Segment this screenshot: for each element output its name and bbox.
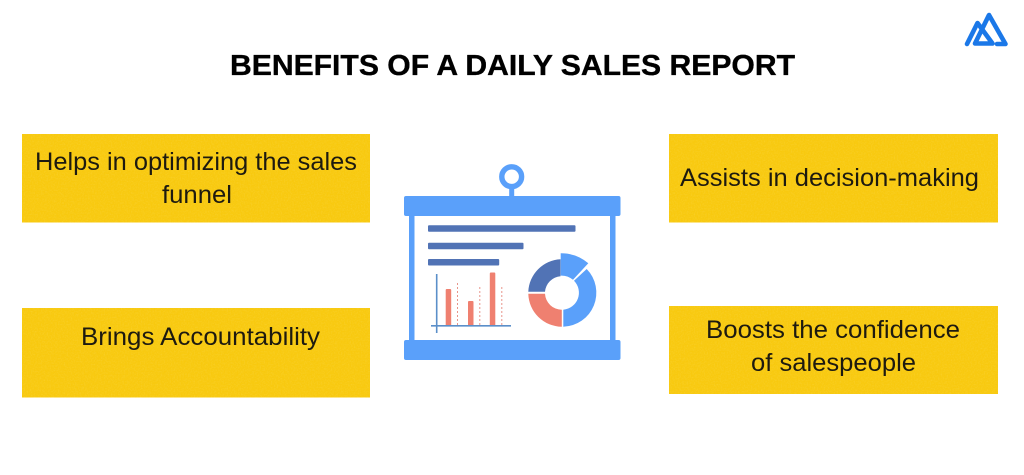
panel: optimizing the sales funnel: funnel (162, 181, 232, 209)
panel: decision-making: Assists in decision-making (680, 164, 979, 192)
panel: optimizing the sales funnel (22, 134, 370, 222)
icon: company logo (967, 15, 1006, 44)
panel: optimizing the sales funnel: Helps in optimizing the sales (35, 148, 357, 176)
donut chart (528, 253, 596, 327)
panel: accountability (22, 308, 370, 398)
panel: confidence of salespeople: of salespeople (751, 349, 916, 377)
icon: presentation board (404, 167, 620, 360)
title: BENEFITS OF A DAILY SALES REPORT (230, 50, 795, 82)
board frame (404, 196, 620, 360)
panel: decision-making (669, 134, 998, 222)
bar chart (431, 272, 511, 333)
panel: confidence of salespeople (669, 306, 998, 394)
panel: accountability: Brings Accountability (81, 323, 321, 351)
board hanger ring (502, 167, 522, 197)
text lines (428, 225, 576, 266)
panel: confidence of salespeople: Boosts the confidence (706, 316, 960, 344)
